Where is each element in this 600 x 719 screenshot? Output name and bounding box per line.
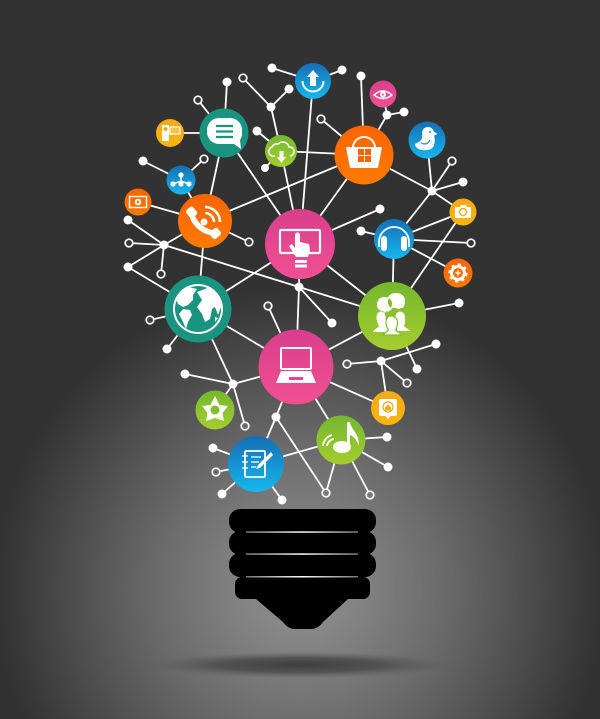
- icon: shopping basket: [334, 126, 394, 184]
- icon: music note: [316, 416, 366, 464]
- icon: touch monitor: [265, 209, 335, 279]
- icon: video camera: [156, 119, 184, 147]
- icon: speech bubble: [200, 108, 248, 158]
- hollow end nodes: [125, 74, 475, 499]
- icon: bird: [408, 122, 446, 158]
- icon: upload arrow: [295, 63, 331, 99]
- bulb shadow: [150, 652, 450, 678]
- icon: photo camera: [450, 198, 476, 226]
- icon: share nodes: [166, 166, 196, 194]
- icon: notepad: [228, 436, 284, 492]
- icon: community group: [358, 282, 426, 350]
- icon: phone with signal: [178, 194, 232, 248]
- bulb screw base: [229, 509, 376, 629]
- icon: gear: [444, 258, 472, 288]
- icon: eye: [370, 80, 396, 108]
- icon: globe: [164, 276, 232, 342]
- connection lines: [128, 68, 471, 500]
- icon: home pin: [371, 391, 405, 425]
- icon: video player: [124, 188, 152, 216]
- icon: headphones: [374, 219, 414, 259]
- icon: laptop: [258, 330, 334, 404]
- icon: cloud download: [265, 135, 297, 167]
- icon: star: [196, 390, 234, 430]
- filled end nodes: [124, 64, 468, 504]
